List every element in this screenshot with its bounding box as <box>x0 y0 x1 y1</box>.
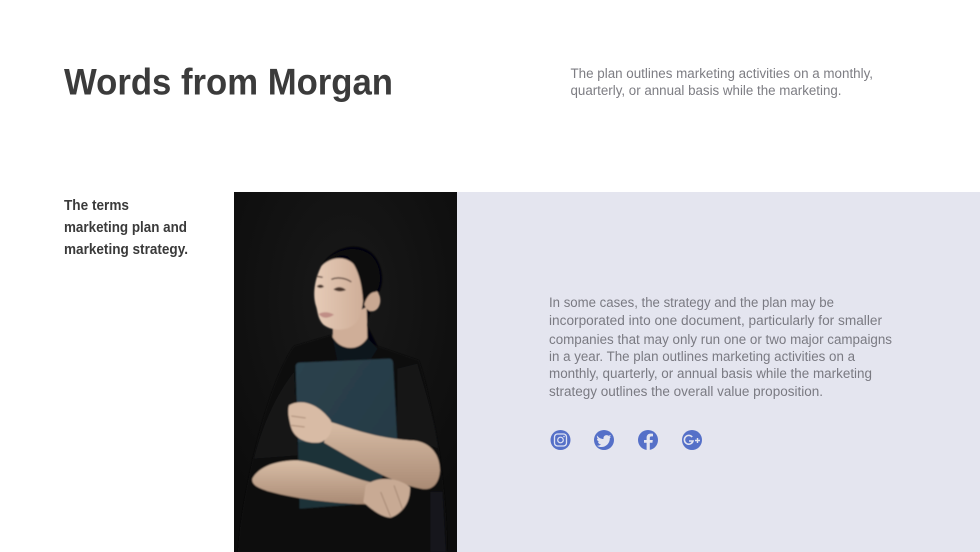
hair front <box>321 249 380 307</box>
brows and eyes <box>317 276 351 282</box>
laptop <box>296 359 397 509</box>
intro text: The plan outlines marketing activities on a monthly, <box>570 66 873 81</box>
lower hand <box>363 479 410 518</box>
neck <box>333 307 367 351</box>
side heading <box>64 198 188 258</box>
body text: monthly, quarterly, or annual basis while the marketing <box>549 366 872 381</box>
hair <box>321 247 382 347</box>
intro text: quarterly, or annual basis while the marketing. <box>570 83 842 98</box>
panel: lavender background <box>457 192 980 552</box>
body text: in a year. The plan outlines marketing activities on a <box>549 349 855 364</box>
intro text <box>570 66 873 98</box>
upper hand <box>288 402 332 443</box>
ear <box>364 289 380 311</box>
jacket <box>238 335 447 552</box>
right forearm <box>324 421 440 489</box>
lower forearm <box>252 460 372 504</box>
collar <box>333 337 377 360</box>
body text <box>549 295 892 399</box>
side heading: marketing strategy. <box>64 242 188 258</box>
body text: incorporated into one document, particularly for smaller <box>549 313 882 328</box>
icon: instagram <box>550 430 570 450</box>
face <box>314 258 363 330</box>
lips <box>319 312 334 318</box>
icon: facebook <box>638 430 658 450</box>
side heading: marketing plan and <box>64 220 187 236</box>
body text: strategy outlines the overall value proposition. <box>549 384 823 399</box>
side heading: The terms <box>64 198 129 214</box>
title: Words from Morgan <box>64 62 393 102</box>
icon: google plus <box>682 430 702 450</box>
icon: twitter <box>594 430 614 450</box>
body text: In some cases, the strategy and the plan may be <box>549 295 834 310</box>
photo: woman holding a laptop <box>234 192 457 552</box>
body text: companies that may only run one or two major campaigns <box>549 332 892 347</box>
